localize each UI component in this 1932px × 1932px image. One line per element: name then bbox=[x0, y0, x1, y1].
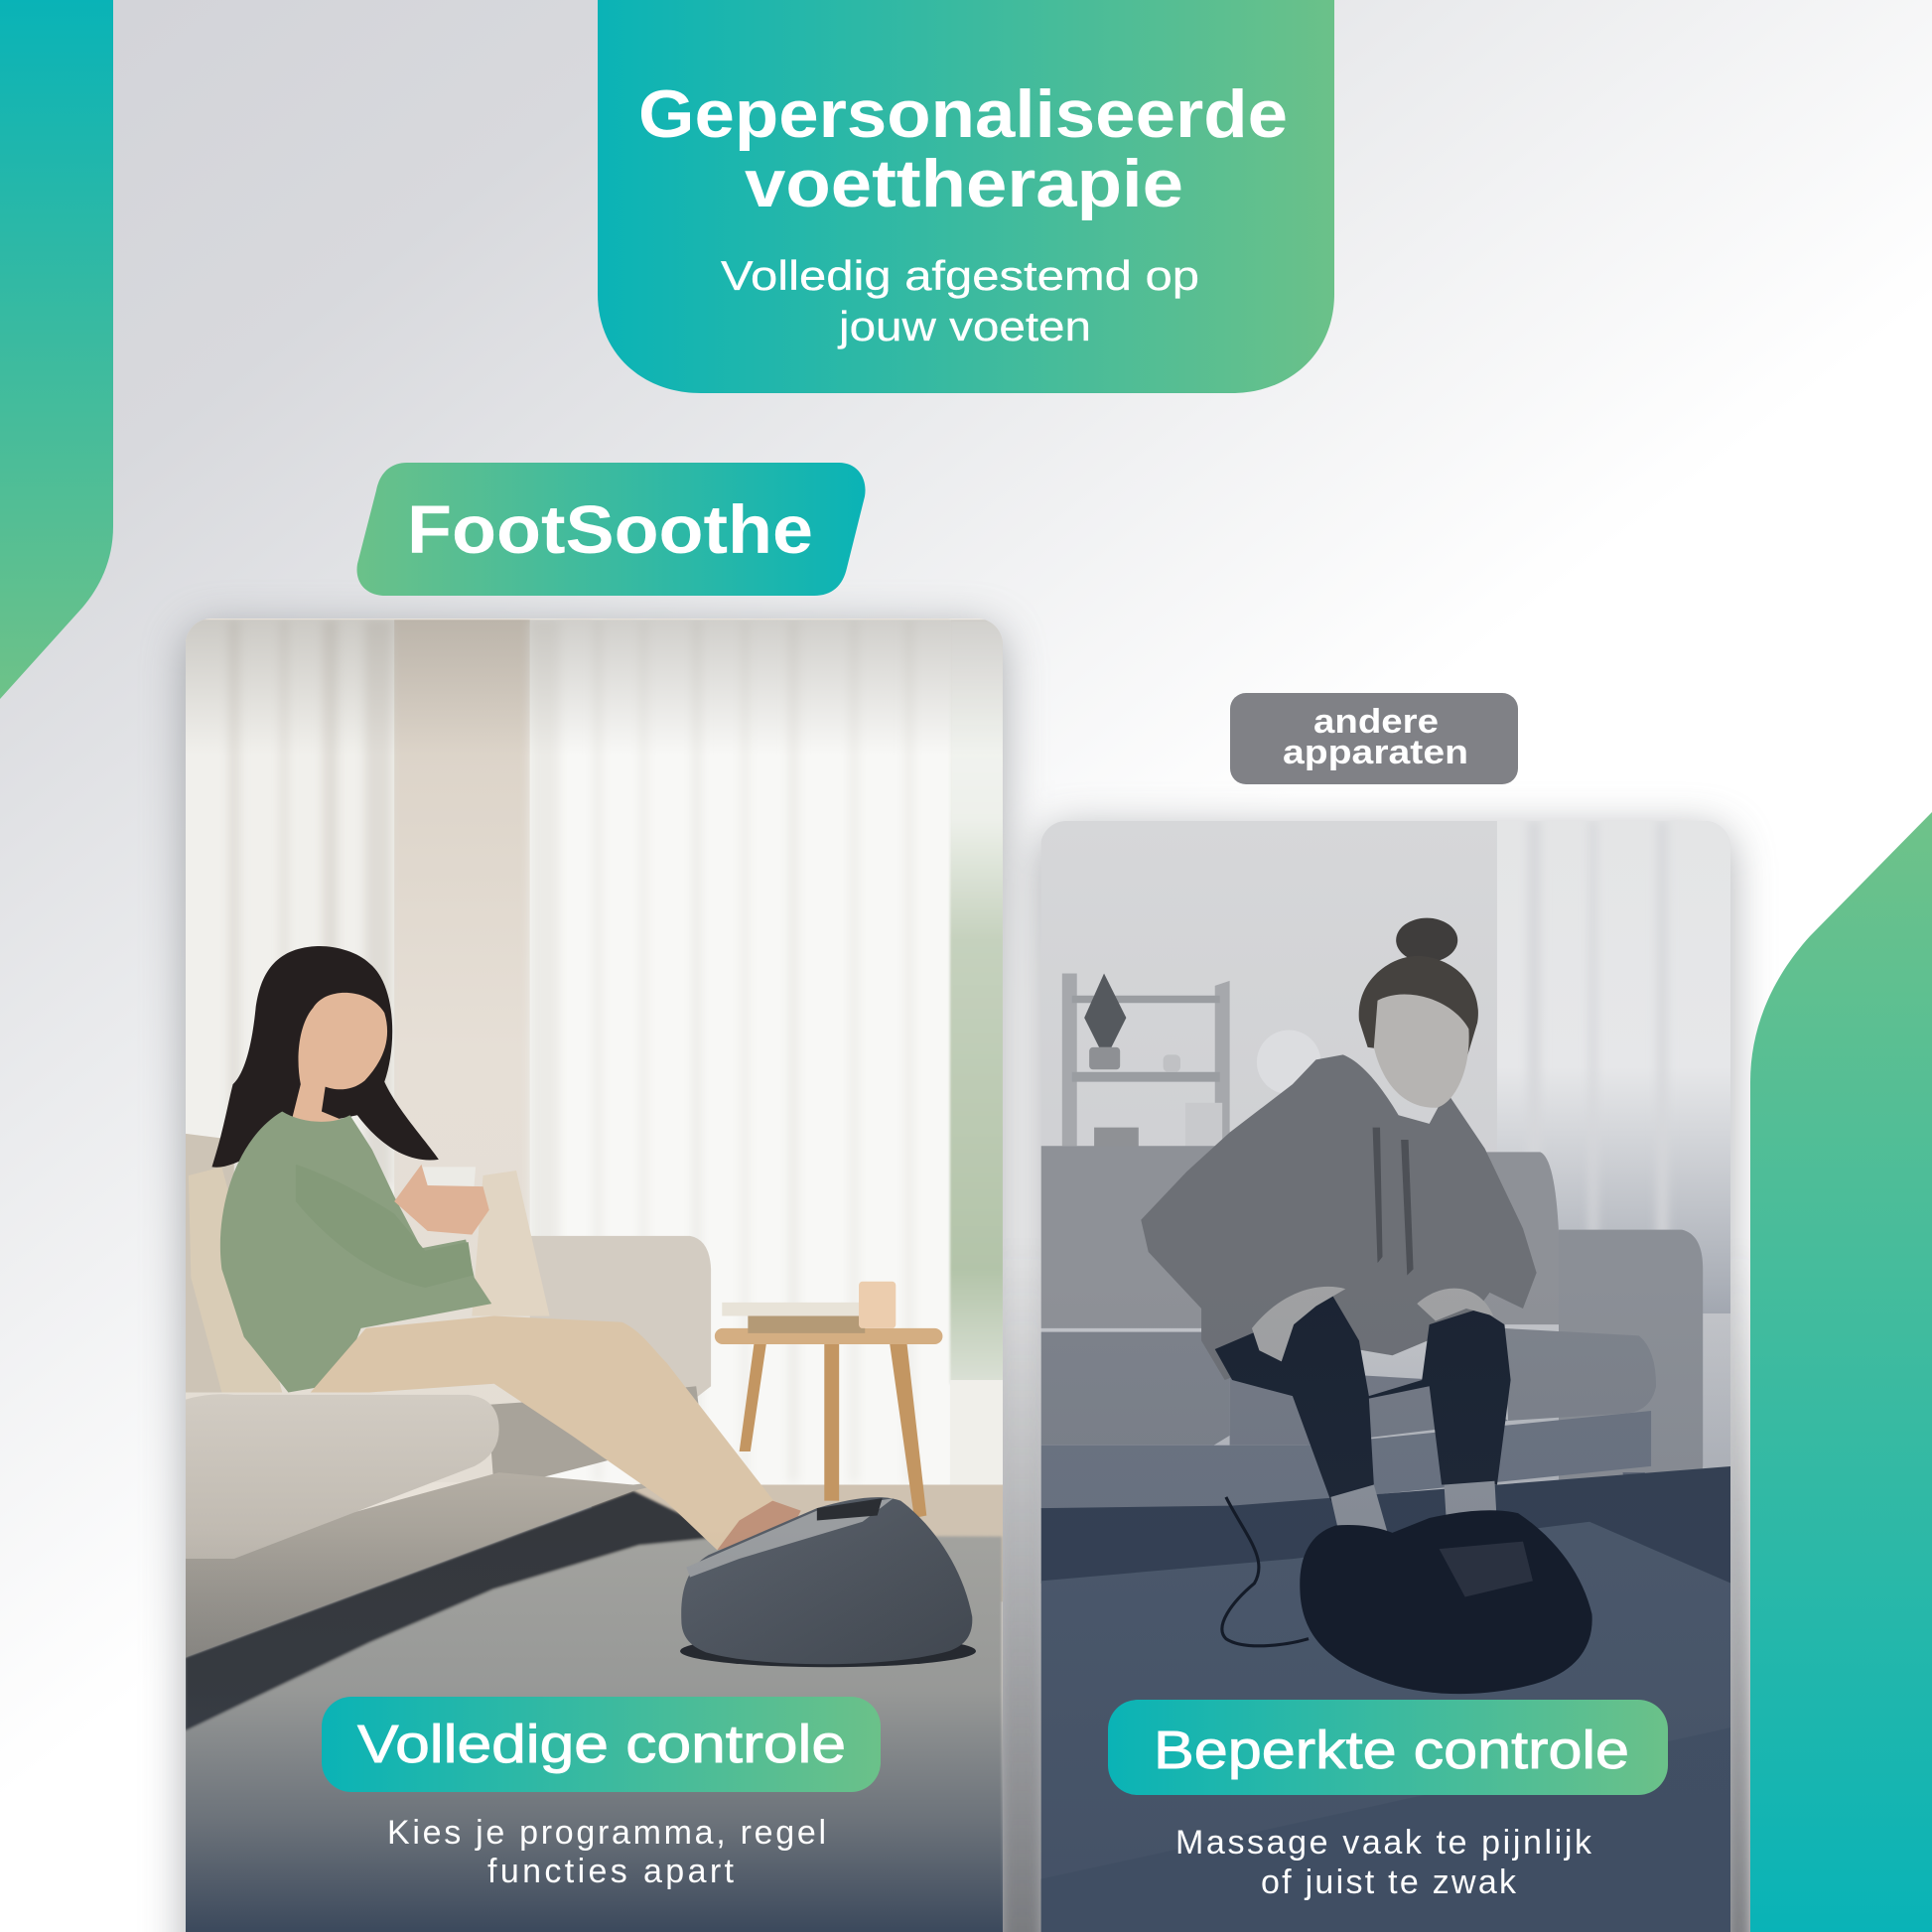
corner shape: right bbox=[1750, 812, 1932, 1932]
hair bbox=[211, 946, 439, 1168]
callout: Volledige controle: Volledige controle bbox=[357, 1715, 846, 1774]
callout: Beperkte controle: Beperkte controle bbox=[1154, 1721, 1629, 1780]
header panel bbox=[598, 0, 1334, 393]
hoodie bbox=[1141, 1054, 1537, 1380]
trousers bbox=[311, 1315, 788, 1550]
andere apparaten tag bbox=[1230, 693, 1518, 784]
subtitle bbox=[721, 252, 1199, 349]
text: Kies je programma: functies apart bbox=[487, 1853, 735, 1890]
photo: sofa bbox=[1041, 1146, 1703, 1525]
panel: andere apparaten photo bbox=[1041, 821, 1731, 1932]
photo: bottom fade bbox=[186, 1604, 1003, 1932]
hands bbox=[394, 1165, 489, 1235]
callout: Volledige controle bbox=[322, 1697, 881, 1792]
text: Massage vaak: Massage vaak te pijnlijk bbox=[1175, 1824, 1592, 1862]
sweater bbox=[220, 1111, 491, 1392]
text: Massage vaak bbox=[1175, 1824, 1592, 1901]
cup bbox=[423, 1168, 476, 1186]
photo: room wall and curtains bbox=[185, 620, 1004, 1525]
photo: foot massager bbox=[680, 1497, 976, 1667]
photo: sofa bbox=[185, 1134, 711, 1657]
face bbox=[291, 993, 387, 1124]
subtitle: Volledig afgestemd op bbox=[721, 252, 1199, 299]
photo: wall bbox=[1041, 821, 1730, 1492]
text: Kies je programma: Kies je programma, regel bbox=[387, 1814, 826, 1852]
callout: Beperkte controle bbox=[1108, 1700, 1668, 1795]
corner shape: top left bbox=[0, 0, 113, 699]
photo: massager device bbox=[1300, 1510, 1592, 1694]
subtitle: jouw voeten bbox=[837, 303, 1091, 349]
photo: dark floor and rug bbox=[1041, 1466, 1731, 1932]
photo: side table bbox=[715, 1282, 942, 1518]
photo: floor bbox=[592, 1485, 1003, 1601]
card shadows bbox=[186, 627, 1730, 1932]
hair bun bbox=[1396, 918, 1457, 962]
text: Massage vaak: of juist te zwak bbox=[1261, 1863, 1517, 1901]
photo: woman with green sweater bbox=[211, 946, 801, 1550]
photo: pillows bbox=[189, 1167, 550, 1392]
photo: rug and dark floor bbox=[185, 1491, 1002, 1932]
photo: fade overlay bbox=[1041, 1282, 1731, 1932]
FootSoothe badge bbox=[357, 463, 866, 596]
photo: woman in hoodie bbox=[1141, 918, 1537, 1540]
title: voettherapie bbox=[745, 146, 1183, 221]
feet bbox=[717, 1501, 801, 1550]
face bbox=[1374, 994, 1469, 1108]
photo: power cable bbox=[1222, 1497, 1309, 1646]
photo: shelf bbox=[1062, 973, 1230, 1147]
panel: FootSoothe photo bbox=[185, 619, 1004, 1932]
photo: curtains bbox=[1497, 821, 1731, 1313]
text: Kies je programma bbox=[387, 1814, 826, 1890]
lower card side shadows bbox=[998, 1241, 1753, 1932]
title: Gepersonaliseerde bbox=[638, 76, 1288, 152]
photo: lamp bbox=[1257, 1031, 1320, 1094]
title bbox=[638, 76, 1288, 221]
andere apparaten tag: andere bbox=[1313, 703, 1439, 741]
ankles bbox=[1330, 1481, 1497, 1540]
andere apparaten tag: apparaten bbox=[1283, 734, 1468, 771]
hands bbox=[1252, 1287, 1345, 1361]
FootSoothe badge: FootSoothe bbox=[407, 491, 813, 568]
leggings bbox=[1215, 1293, 1511, 1501]
hair bbox=[1359, 956, 1478, 1059]
